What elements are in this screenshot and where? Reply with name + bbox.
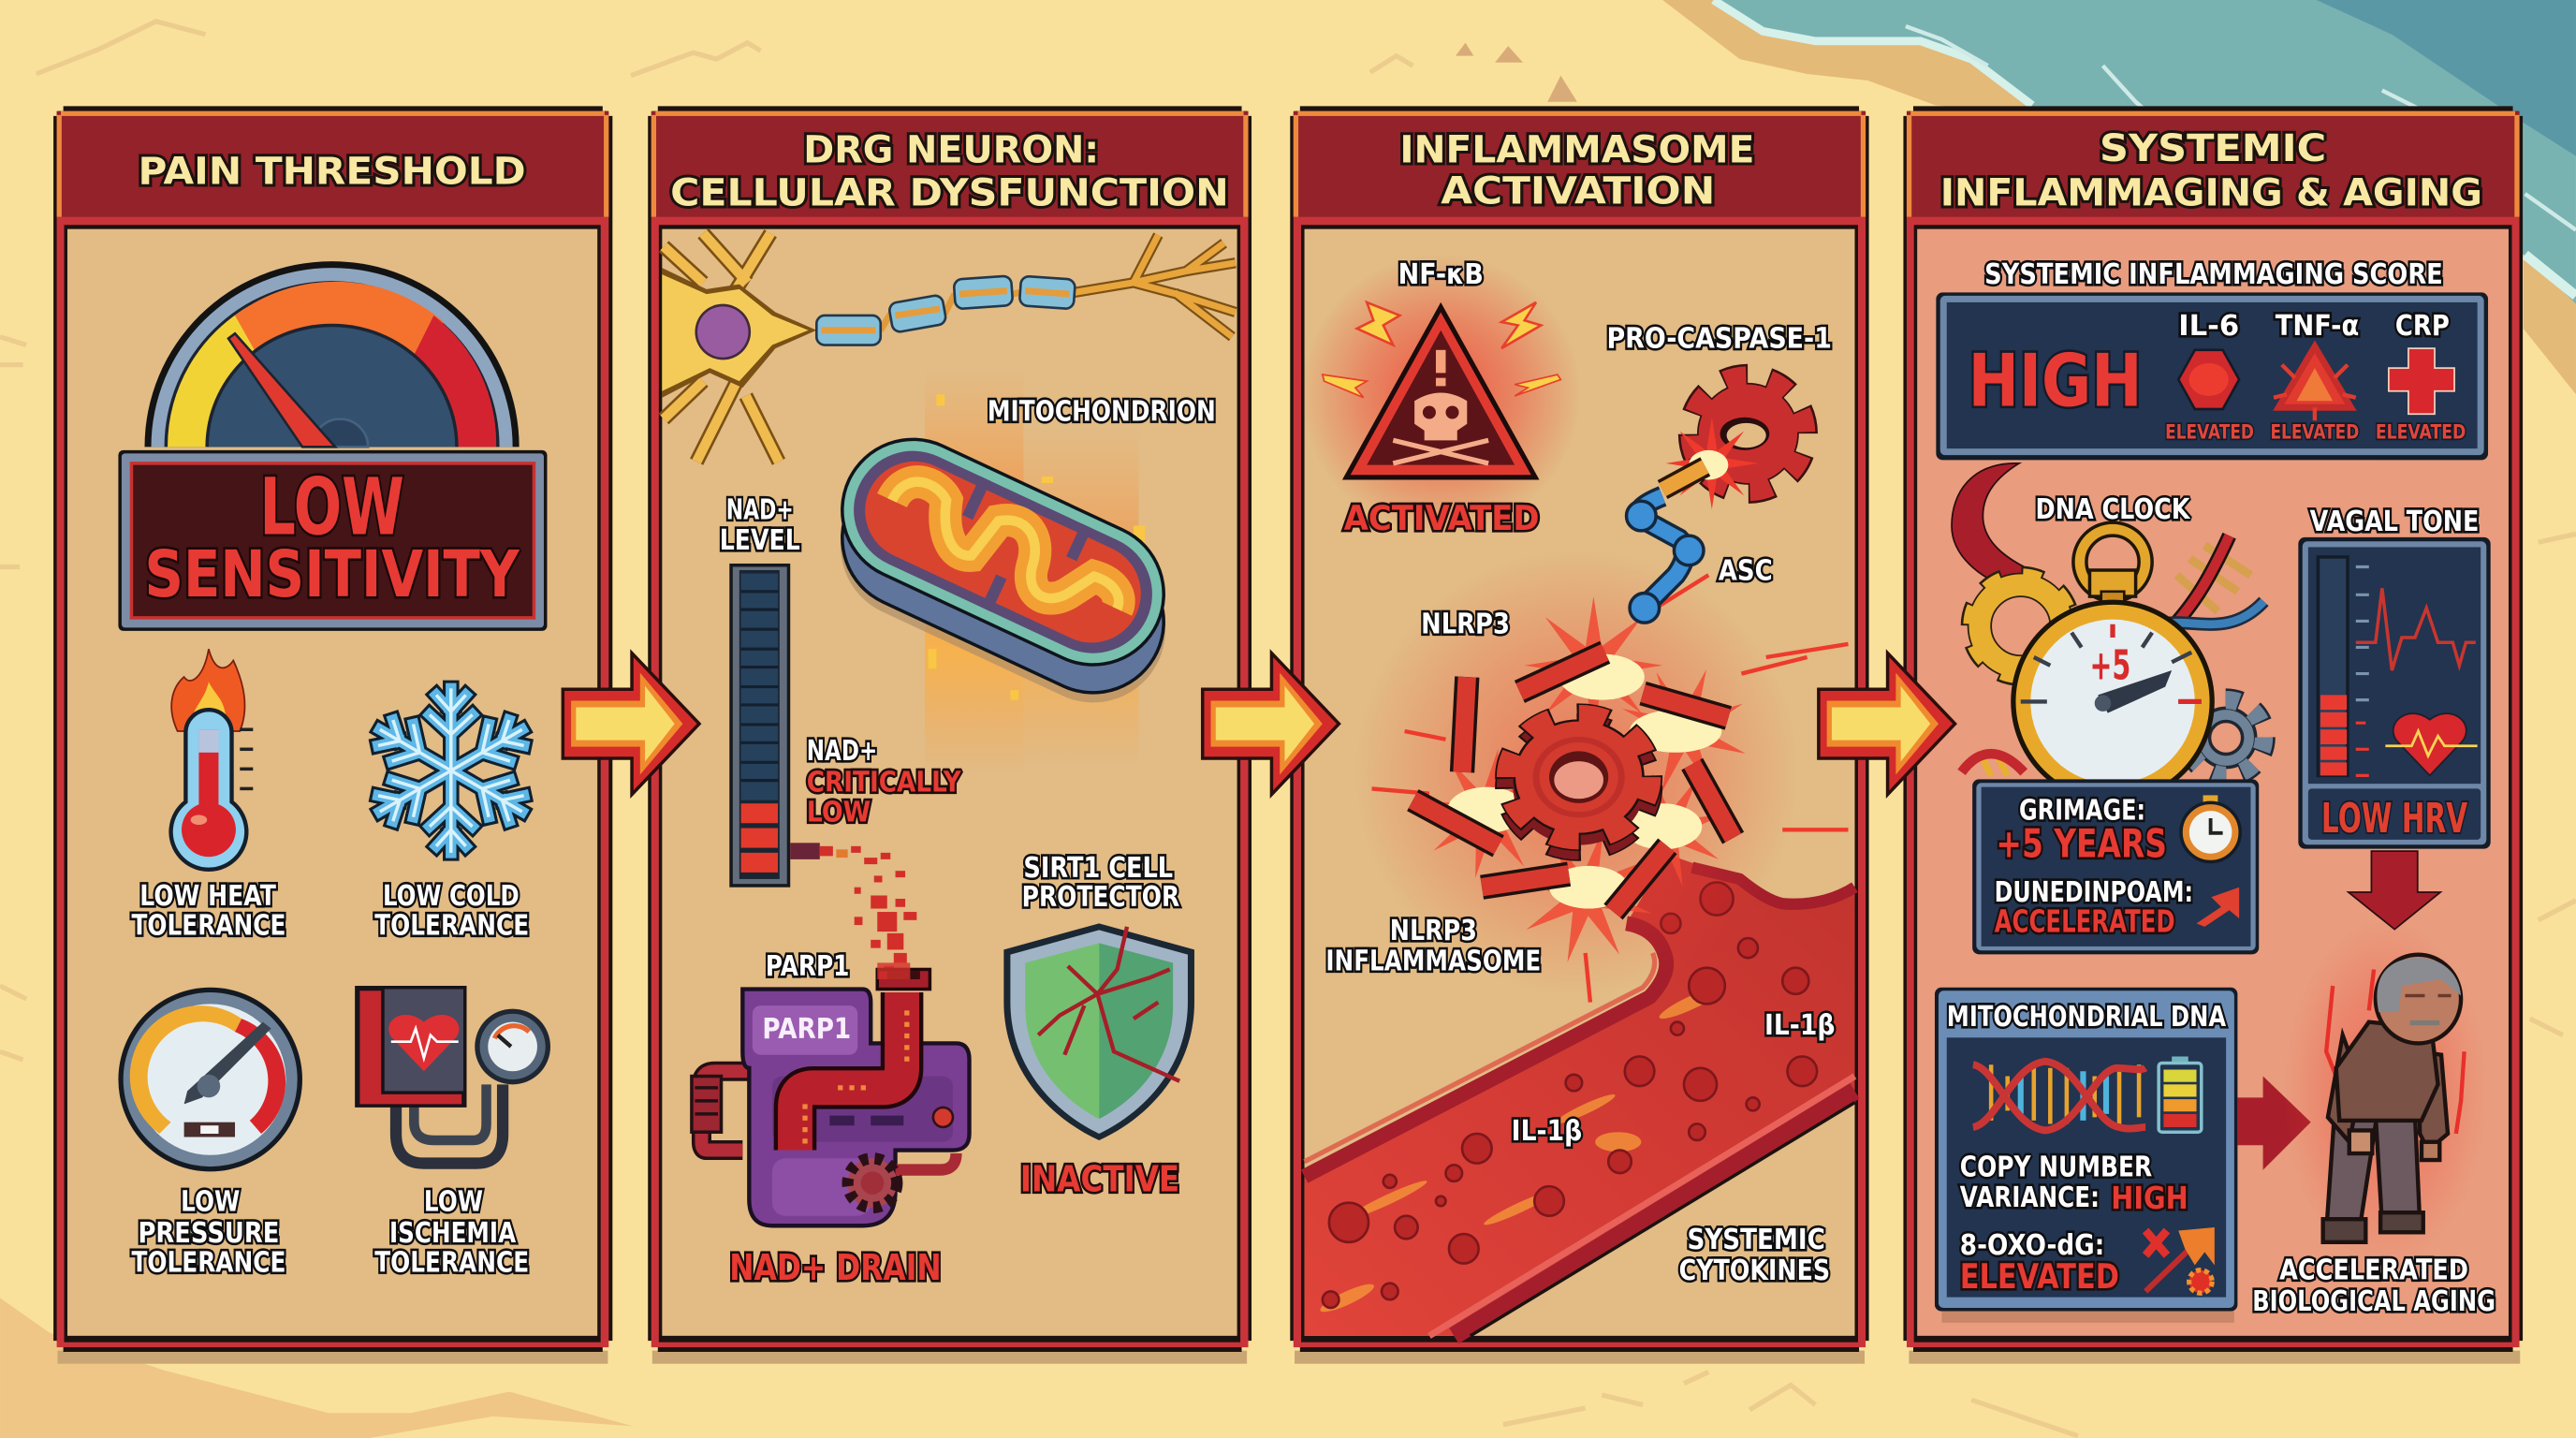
ocean bbox=[1662, 0, 2576, 394]
label: low heat tolerance: LOW HEAT bbox=[139, 880, 276, 913]
label: systemic cytokines: CYTOKINES bbox=[1679, 1255, 1830, 1287]
GrimAge box: +5 YEARS bbox=[1996, 821, 2167, 867]
title: PAIN THRESHOLD bbox=[138, 150, 526, 194]
arrow to aging figure bbox=[2237, 1077, 2311, 1170]
label: IL-1 beta upper: IL-1β bbox=[1764, 1009, 1835, 1042]
label: NAD+ critically low: NAD+ bbox=[807, 735, 877, 768]
title: INFLAMMASOME bbox=[1399, 128, 1754, 172]
mitochondrial DNA box: VARIANCE: bbox=[1960, 1181, 2100, 1214]
aged figure bbox=[2284, 920, 2487, 1265]
label: vagal tone: VAGAL TONE bbox=[2310, 506, 2479, 538]
CRP marker: CRP bbox=[2395, 310, 2450, 343]
DNA helix icon bbox=[1973, 1062, 2145, 1130]
panel frame bbox=[1903, 106, 2523, 1364]
label: pro-caspase-1: PRO-CASPASE-1 bbox=[1606, 322, 1832, 355]
title: SYSTEMIC bbox=[2100, 126, 2326, 170]
label: NAD+ level: LEVEL bbox=[720, 524, 800, 557]
label: low cold tolerance: LOW COLD bbox=[383, 880, 520, 913]
GrimAge box: GRIMAGE: bbox=[2019, 794, 2145, 827]
label: NLRP3 inflammasome: INFLAMMASOME bbox=[1325, 946, 1541, 978]
steel gear bbox=[2188, 700, 2263, 775]
panel frame bbox=[53, 106, 612, 1364]
curved red arrow arc bbox=[1952, 463, 2027, 588]
icon: blood pressure cuff bbox=[355, 986, 550, 1164]
PARP1 machine: PARP1 bbox=[762, 1013, 851, 1046]
label: IL-1 beta lower: IL-1β bbox=[1512, 1115, 1582, 1148]
label: NAD+ drain: NAD+ DRAIN bbox=[729, 1247, 942, 1289]
TNF-alpha marker bbox=[2271, 310, 2359, 444]
label: NAD+ critically low: CRITICALLY bbox=[807, 766, 961, 799]
damage icons bbox=[2145, 1227, 2215, 1293]
label: low heat tolerance bbox=[131, 880, 285, 943]
icon: SIRT1 shield bbox=[1003, 923, 1194, 1140]
inflammaging score box bbox=[1936, 292, 2488, 460]
label: SIRT1 cell protector: PROTECTOR bbox=[1022, 881, 1179, 914]
label: low pressure tolerance: LOW bbox=[181, 1185, 240, 1218]
title bbox=[1399, 128, 1754, 213]
mitochondrial DNA box: HIGH bbox=[2111, 1180, 2188, 1216]
mitochondrion bbox=[817, 370, 1189, 772]
ASC chain bbox=[1627, 418, 1758, 623]
vagal tone box bbox=[2298, 537, 2491, 849]
icon: NF-kB warning triangle bbox=[1301, 255, 1580, 534]
label: low ischemia tolerance: TOLERANCE bbox=[374, 1246, 529, 1279]
label: activated: ACTIVATED bbox=[1344, 498, 1540, 538]
TNF-alpha marker: ELEVATED bbox=[2271, 420, 2359, 444]
panel: DRG neuron bbox=[648, 106, 1251, 1364]
GrimAge box bbox=[1972, 779, 2259, 954]
DNA strand bbox=[1962, 536, 2263, 775]
arrow down to aging figure bbox=[2349, 851, 2440, 930]
arrow: panel 3 to panel 4 bbox=[1819, 653, 1955, 795]
NAD+ level bar bbox=[729, 564, 790, 888]
label: accelerated biological aging bbox=[2252, 1255, 2496, 1318]
label: SIRT1 cell protector bbox=[1022, 852, 1179, 914]
CRP marker bbox=[2376, 310, 2466, 444]
NLRP3 rods bbox=[1412, 653, 1734, 912]
icon: thermometer with flame bbox=[171, 649, 253, 870]
stopwatch DNA clock: +5 bbox=[2089, 642, 2130, 690]
label: low pressure tolerance bbox=[131, 1185, 285, 1279]
GrimAge box: ACCELERATED bbox=[1995, 903, 2175, 940]
gauge bbox=[145, 261, 520, 447]
mini stopwatch bbox=[2181, 795, 2240, 862]
label: low cold tolerance bbox=[374, 880, 529, 943]
mitochondrial DNA box: 8-OXO-dG: bbox=[1960, 1229, 2104, 1262]
label: SIRT1 cell protector: SIRT1 CELL bbox=[1023, 852, 1173, 885]
label: NLRP3: NLRP3 bbox=[1421, 609, 1510, 641]
label: NLRP3 inflammasome bbox=[1325, 915, 1541, 978]
label: NF-kB: NF-κB bbox=[1398, 258, 1484, 291]
panel: systemic inflammaging and aging bbox=[1903, 106, 2523, 1364]
icon: snowflake bbox=[369, 688, 533, 853]
blood vessel with cytokines bbox=[1305, 855, 1854, 1336]
title: CELLULAR DYSFUNCTION bbox=[670, 170, 1229, 214]
IL-6 marker bbox=[2165, 310, 2254, 444]
label: systemic cytokines: SYSTEMIC bbox=[1687, 1224, 1825, 1256]
explosion glow bbox=[1355, 550, 1848, 1003]
label: low ischemia tolerance: LOW bbox=[424, 1185, 483, 1218]
label: low ischemia tolerance: ISCHEMIA bbox=[389, 1217, 516, 1250]
label: mitochondrion: MITOCHONDRION bbox=[988, 395, 1216, 428]
label: low pressure tolerance: TOLERANCE bbox=[131, 1246, 285, 1279]
low sensitivity readout: LOW bbox=[259, 461, 404, 552]
label: NLRP3 inflammasome: NLRP3 bbox=[1390, 915, 1477, 947]
title bbox=[670, 128, 1229, 214]
label: low heat tolerance: TOLERANCE bbox=[131, 910, 285, 943]
icon: pressure gauge bbox=[118, 988, 302, 1171]
mitochondrial DNA box: ELEVATED bbox=[1960, 1256, 2119, 1297]
PARP1 machine bbox=[692, 962, 970, 1225]
title bbox=[1940, 126, 2482, 214]
label: NAD+ critically low bbox=[807, 735, 961, 829]
central inflammasome gear bbox=[1506, 713, 1651, 851]
IL-6 marker: ELEVATED bbox=[2165, 420, 2254, 444]
title: INFLAMMAGING & AGING bbox=[1940, 170, 2482, 214]
label: accelerated biological aging: ACCELERATED bbox=[2279, 1255, 2468, 1287]
arrow: panel 1 to panel 2 bbox=[563, 653, 699, 795]
GrimAge box: DUNEDINPOAM: bbox=[1995, 876, 2193, 909]
battery icon bbox=[2159, 1056, 2202, 1132]
label: accelerated biological aging: BIOLOGICAL AGING bbox=[2252, 1285, 2496, 1318]
HIGH value: HIGH bbox=[1969, 339, 2143, 423]
label: low pressure tolerance: PRESSURE bbox=[138, 1217, 279, 1250]
label: inactive: INACTIVE bbox=[1020, 1158, 1179, 1200]
label: low cold tolerance: TOLERANCE bbox=[374, 910, 529, 943]
label: systemic cytokines bbox=[1679, 1224, 1830, 1287]
IL-6 marker: IL-6 bbox=[2178, 310, 2239, 343]
CRP marker: ELEVATED bbox=[2376, 420, 2466, 444]
label: NAD+ level: NAD+ bbox=[726, 494, 794, 527]
title: ACTIVATION bbox=[1441, 169, 1715, 213]
panel frame bbox=[1290, 106, 1869, 1364]
label: NAD+ critically low: LOW bbox=[807, 797, 871, 829]
mitochondrial DNA box: MITOCHONDRIAL DNA bbox=[1947, 1001, 2226, 1034]
panel: pain threshold bbox=[53, 106, 612, 1364]
vagal tone box: LOW HRV bbox=[2321, 795, 2467, 843]
mitochondrial DNA box bbox=[1935, 988, 2237, 1323]
arrow: panel 2 to panel 3 bbox=[1203, 653, 1339, 795]
label: DNA clock: DNA CLOCK bbox=[2036, 493, 2191, 526]
low sensitivity readout: SENSITIVITY bbox=[145, 537, 520, 612]
mitochondrial DNA box: COPY NUMBER bbox=[1960, 1152, 2152, 1184]
accelerating arrow bbox=[2197, 888, 2239, 927]
label: score heading: SYSTEMIC INFLAMMAGING SCORE bbox=[1984, 258, 2443, 291]
pro-caspase gear bbox=[1675, 360, 1822, 507]
stopwatch DNA clock bbox=[1962, 529, 2263, 803]
label: NAD+ level bbox=[720, 494, 800, 557]
panel: inflammasome activation bbox=[1290, 106, 1869, 1364]
NAD+ particle trail bbox=[790, 843, 916, 975]
title: DRG NEURON: bbox=[803, 128, 1099, 172]
label: PARP1: PARP1 bbox=[766, 950, 849, 983]
label: low ischemia tolerance bbox=[374, 1185, 529, 1279]
label: ASC: ASC bbox=[1719, 555, 1773, 588]
neuron bbox=[662, 233, 1236, 462]
panel frame bbox=[648, 106, 1251, 1364]
low sensitivity readout bbox=[118, 450, 547, 631]
TNF-alpha marker: TNF-α bbox=[2276, 310, 2359, 343]
yellow gear bbox=[1973, 579, 2069, 674]
